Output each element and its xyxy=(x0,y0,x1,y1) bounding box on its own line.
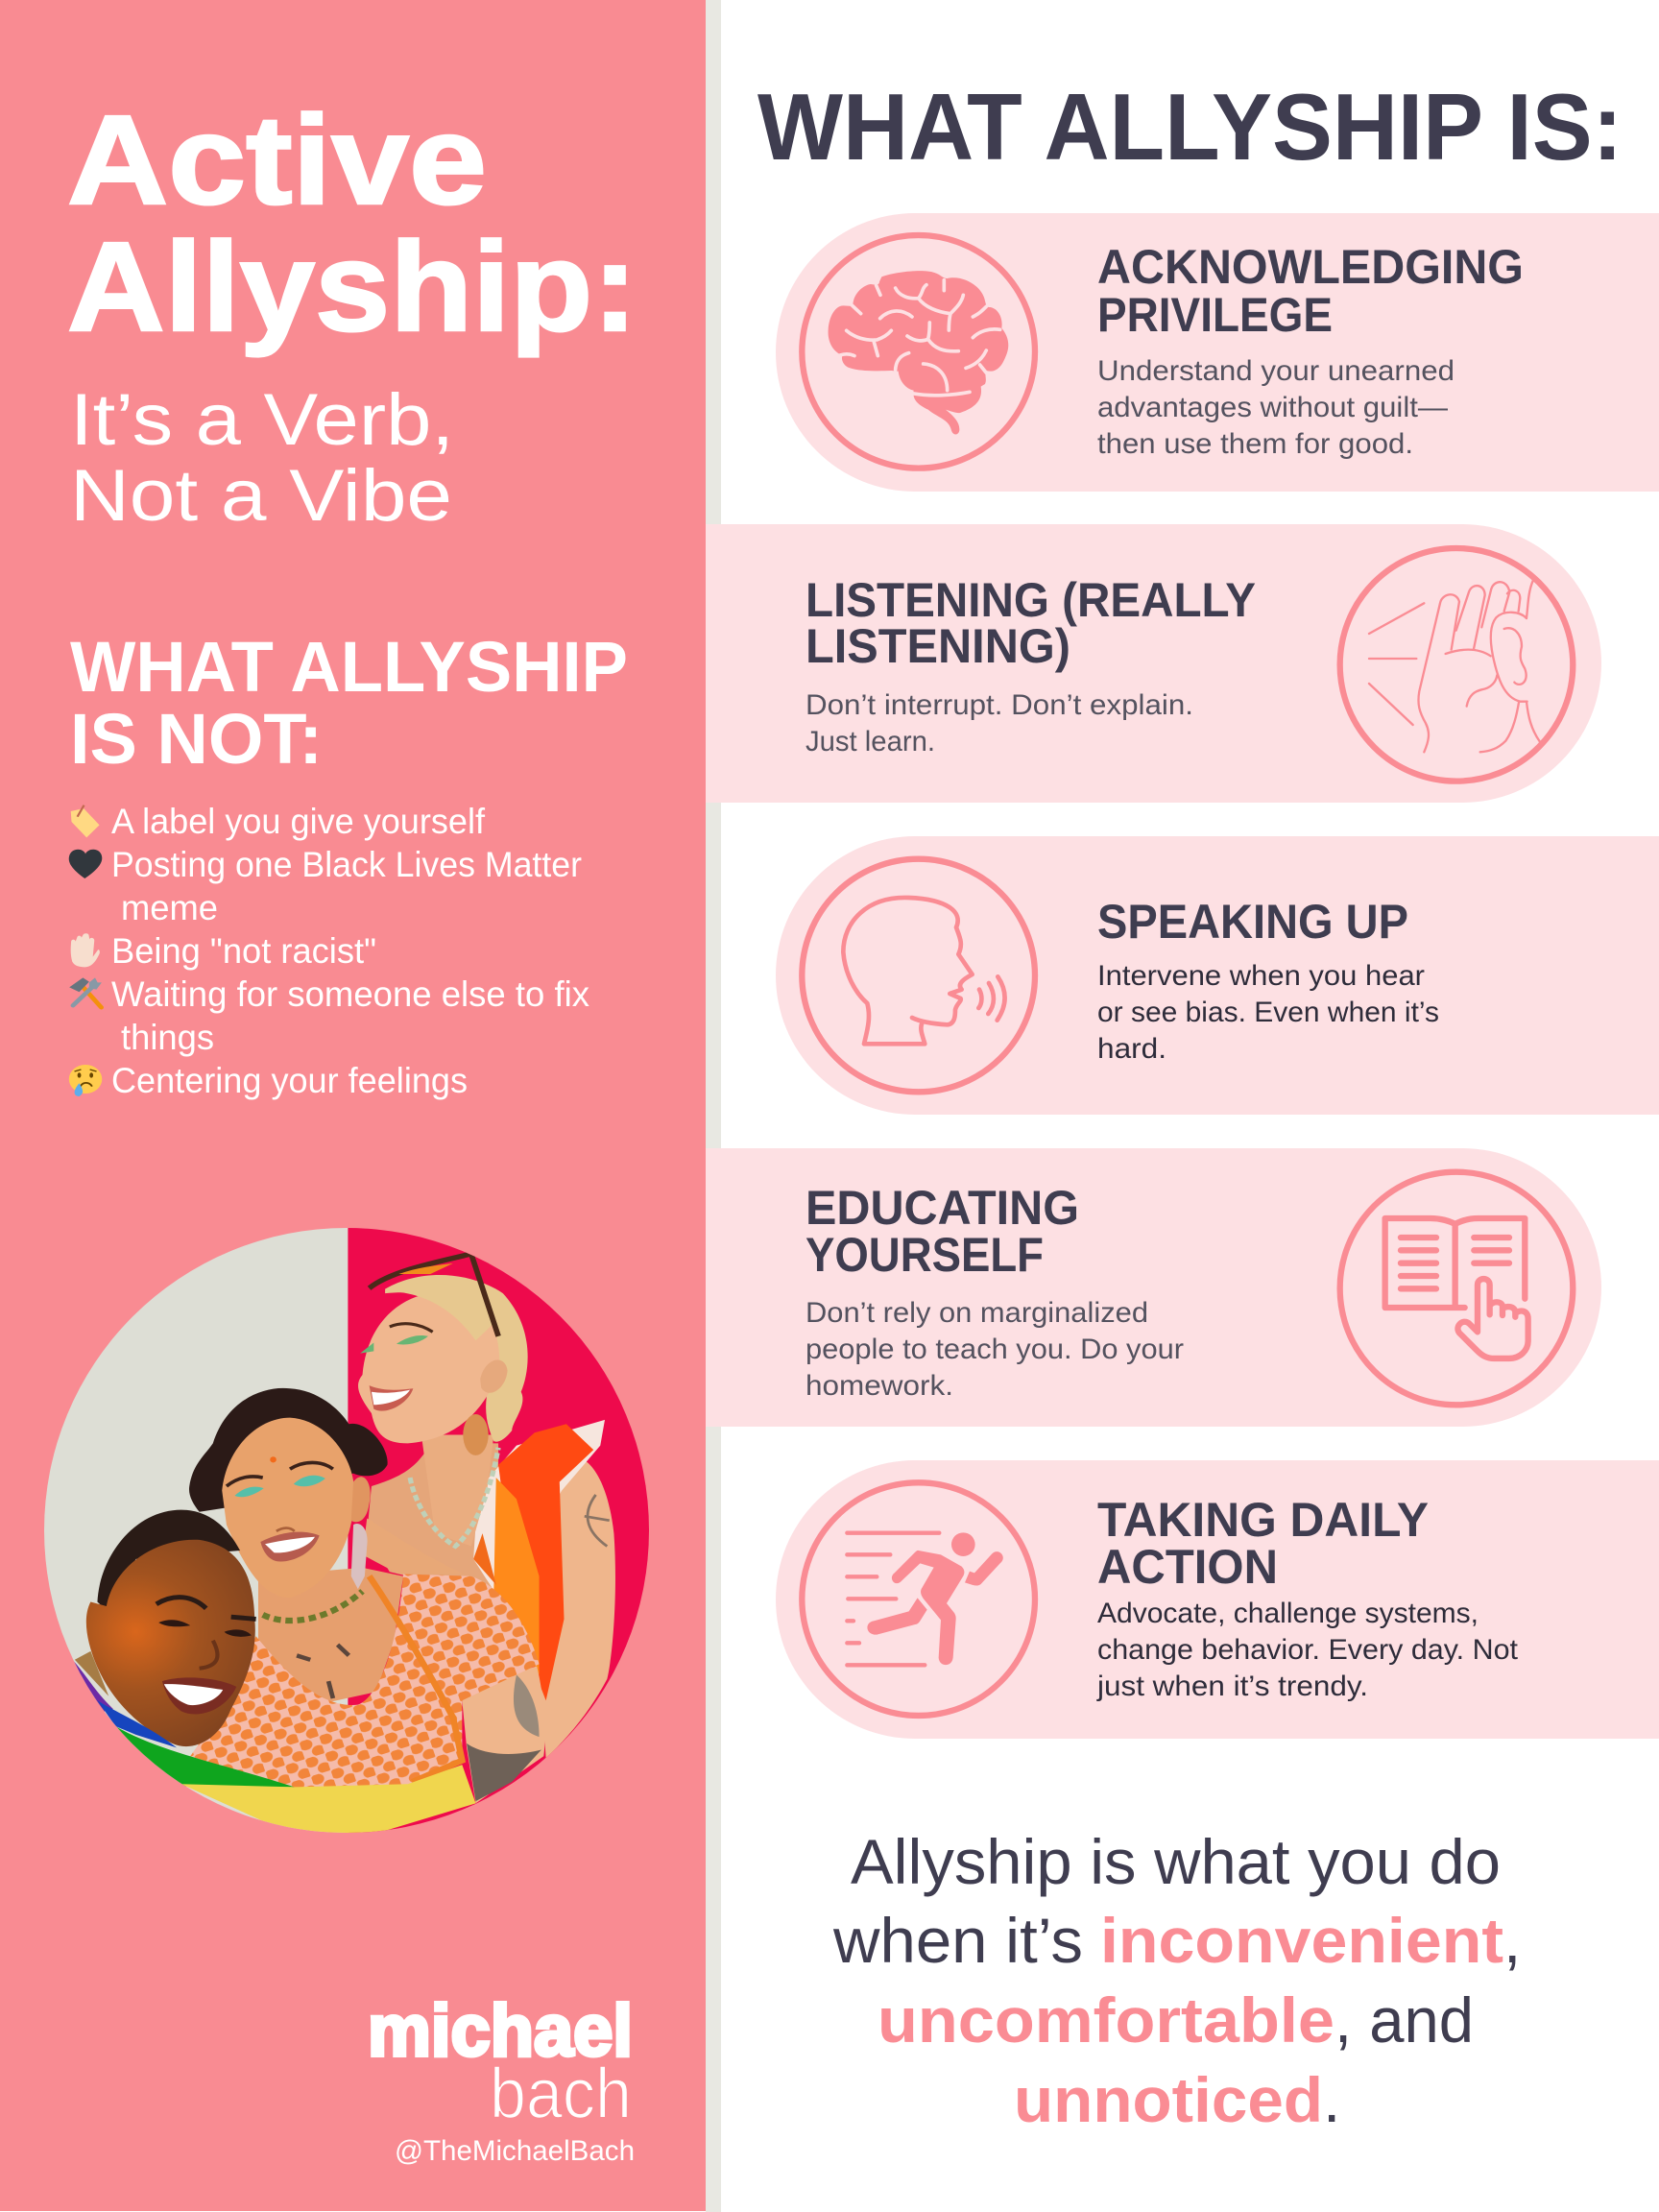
list: what allyship is not: Waiting for someone else to fix xyxy=(111,974,589,1014)
text: acknowledging privilege: advantages without guilt— xyxy=(1097,392,1448,423)
text: taking daily action: change behavior. Every day. Not xyxy=(1097,1634,1519,1666)
logo: michael bach: michael xyxy=(368,1990,633,2072)
text: taking daily action: Advocate, challenge systems, xyxy=(1097,1598,1479,1629)
icon: crying face xyxy=(69,1065,102,1096)
text: listening: LISTENING) xyxy=(805,619,1070,673)
text: speaking up: or see bias. Even when it’s xyxy=(1097,997,1439,1028)
text: listening: Just learn. xyxy=(805,726,935,757)
closing statement: , xyxy=(1503,1905,1521,1976)
closing statement: uncomfortable xyxy=(878,1984,1334,2056)
subtitle: Not a Vibe xyxy=(70,455,452,537)
text: educating yourself: EDUCATING xyxy=(805,1181,1079,1235)
title xyxy=(67,89,637,357)
text: acknowledging privilege: PRIVILEGE xyxy=(1097,288,1333,342)
list: what allyship is not: Posting one Black Lives Matter xyxy=(111,845,582,884)
closing statement: , and xyxy=(1334,1984,1474,2056)
icon: tag xyxy=(71,805,100,837)
heading: what allyship is not: WHAT ALLYSHIP xyxy=(70,627,628,707)
text: acknowledging privilege: ACKNOWLEDGING xyxy=(1097,240,1524,294)
list: what allyship is not: Being "not racist" xyxy=(111,931,376,971)
list: what allyship is not: A label you give yourself xyxy=(111,802,486,841)
closing statement: unnoticed xyxy=(1014,2064,1323,2135)
logo: michael bach: bach xyxy=(490,2054,632,2133)
text: taking daily action xyxy=(1096,1493,1519,1702)
closing statement: inconvenient xyxy=(1100,1905,1503,1976)
text: educating yourself: Don’t rely on marginalized xyxy=(805,1297,1148,1329)
heading: what allyship is not: IS NOT: xyxy=(70,699,323,779)
text: speaking up: SPEAKING UP xyxy=(1097,895,1408,949)
title: Active xyxy=(67,89,487,230)
icon: raised hand xyxy=(71,933,100,967)
icon: book with pointing hand xyxy=(1340,1172,1573,1405)
icon: speaking head xyxy=(802,859,1035,1092)
text: speaking up: Intervene when you hear xyxy=(1097,960,1425,992)
card: listening xyxy=(706,524,1601,803)
icon: running figure xyxy=(802,1482,1035,1716)
text: educating yourself: YOURSELF xyxy=(805,1228,1044,1282)
logo: michael bach xyxy=(368,1990,635,2167)
subtitle: It’s a Verb, xyxy=(70,379,454,461)
card: speaking up xyxy=(776,836,1659,1115)
icon: hammer and wrench xyxy=(69,977,102,1007)
text: speaking up: hard. xyxy=(1097,1033,1166,1065)
text: educating yourself: people to teach you. Do your xyxy=(805,1334,1184,1365)
text: acknowledging privilege xyxy=(1097,240,1524,460)
card: taking daily action xyxy=(776,1460,1659,1739)
title: Allyship: xyxy=(67,216,637,357)
list: what allyship is not: things xyxy=(121,1018,214,1057)
text: educating yourself xyxy=(805,1181,1184,1402)
closing statement: . xyxy=(1323,2064,1340,2135)
text: taking daily action: TAKING DAILY xyxy=(1097,1493,1429,1547)
text: educating yourself: homework. xyxy=(805,1370,953,1402)
heading: what allyship is not xyxy=(70,627,628,779)
text: speaking up xyxy=(1097,895,1439,1065)
text: acknowledging privilege: then use them for good. xyxy=(1097,428,1413,460)
text: listening: LISTENING (REALLY xyxy=(805,573,1256,627)
list: what allyship is not xyxy=(111,802,589,1100)
closing statement: Allyship is what you do xyxy=(851,1826,1501,1897)
icon: hand to ear xyxy=(1340,548,1573,781)
text: listening: Don’t interrupt. Don’t explain. xyxy=(805,689,1193,721)
list: what allyship is not: Centering your feelings xyxy=(111,1061,468,1100)
panel: left sidebar xyxy=(0,0,710,2211)
card: educating yourself xyxy=(706,1148,1601,1427)
subtitle xyxy=(70,379,454,537)
list: what allyship is not: meme xyxy=(121,888,218,927)
photo: three friends with pride flags xyxy=(44,1228,649,1833)
text: taking daily action: ACTION xyxy=(1097,1540,1278,1594)
icon: black heart xyxy=(69,850,102,878)
closing statement: when it’s xyxy=(832,1905,1083,1976)
text: listening xyxy=(805,573,1256,757)
logo: michael bach: @TheMichaelBach xyxy=(395,2135,635,2167)
heading: what allyship is: WHAT ALLYSHIP IS: xyxy=(757,74,1623,180)
text: acknowledging privilege: Understand your unearned xyxy=(1097,355,1455,387)
closing statement xyxy=(832,1826,1521,2135)
card: acknowledging privilege xyxy=(776,213,1659,492)
icon: brain xyxy=(802,235,1035,469)
icons: list emoji xyxy=(69,805,102,1096)
text: taking daily action: just when it’s trendy. xyxy=(1096,1671,1368,1702)
